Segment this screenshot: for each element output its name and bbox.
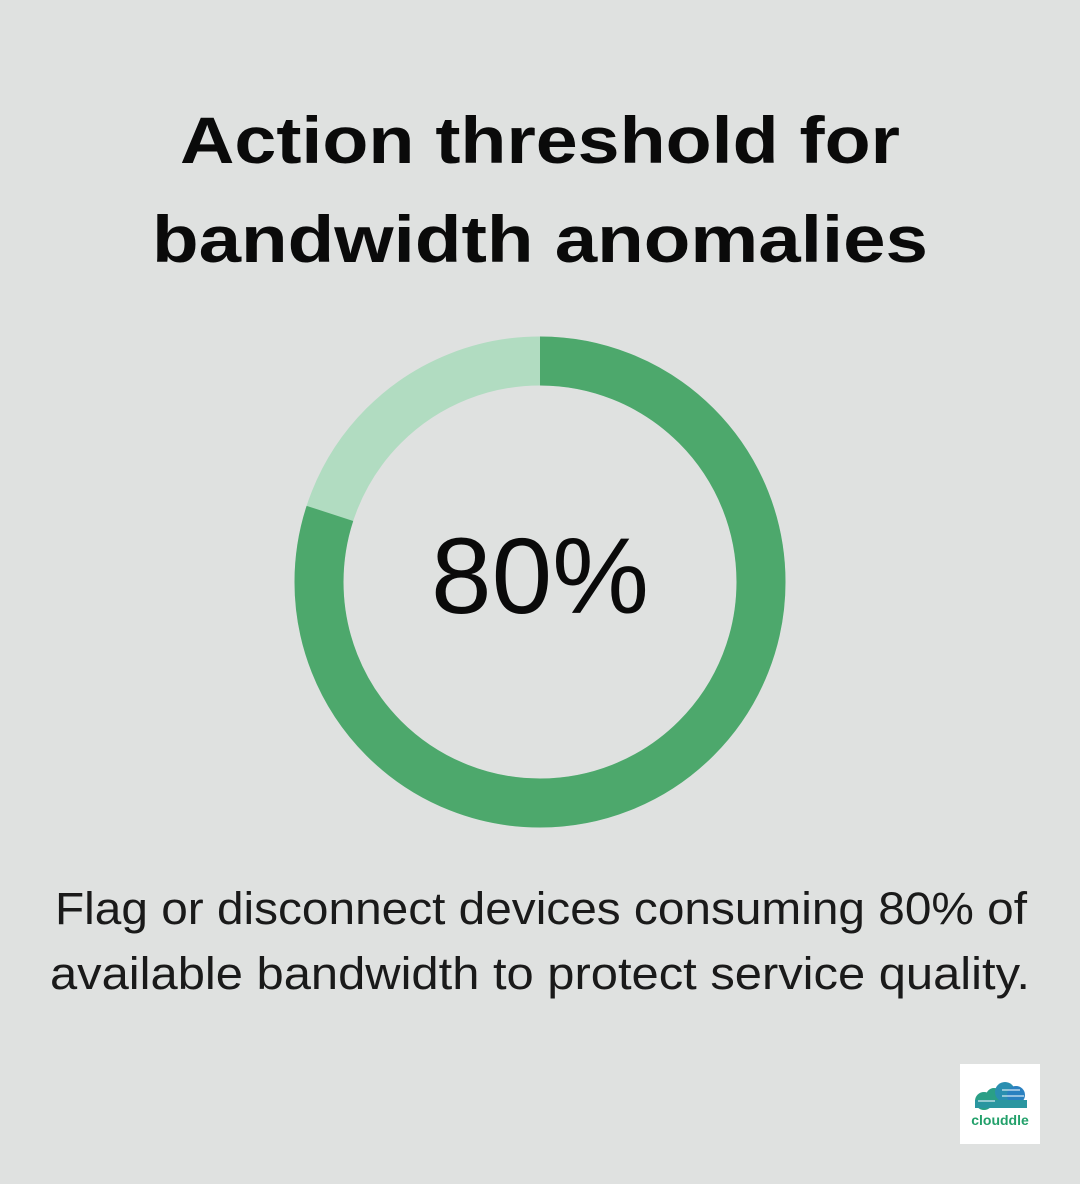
description text bbox=[50, 883, 1030, 999]
title bbox=[152, 103, 928, 276]
logo: clouddle bbox=[971, 1112, 1029, 1128]
donut chart bbox=[319, 361, 761, 803]
description text: Flag or disconnect devices consuming 80% of bbox=[55, 883, 1028, 934]
title: Action threshold for bbox=[180, 103, 900, 177]
center value: 80% bbox=[431, 515, 649, 636]
description text: available bandwidth to protect service quality. bbox=[50, 948, 1030, 999]
title: bandwidth anomalies bbox=[152, 202, 928, 276]
logo bbox=[960, 1064, 1040, 1144]
